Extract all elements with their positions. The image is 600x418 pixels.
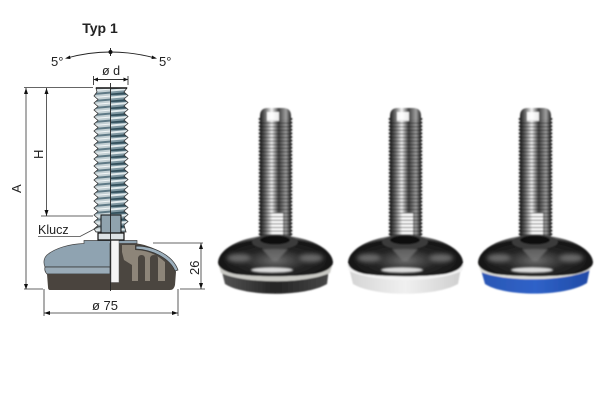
base: grey dome half [44, 240, 137, 267]
title: Typ 1 [82, 20, 118, 36]
tilt angle indicator: 5° [159, 54, 171, 69]
wrench flat [101, 215, 121, 233]
dimension diameter 75: ø 75 [92, 298, 118, 313]
dimension 26 [153, 243, 205, 289]
threaded rod [94, 88, 128, 232]
nut [98, 233, 124, 240]
centre line [110, 83, 112, 291]
dimension diameter 75 [44, 289, 178, 316]
dimension 26: 26 [187, 261, 202, 275]
ball joint slot [111, 240, 119, 282]
diameter d dimension: ø d [102, 64, 120, 78]
dimension H: H [31, 150, 46, 159]
base: section right half [110, 244, 178, 290]
technical drawing: section view [9, 48, 205, 316]
photo: leveling foot with black base [218, 108, 333, 294]
dimension A [9, 88, 93, 290]
base: lower grey band [45, 267, 110, 274]
photo: leveling foot with blue base [478, 108, 593, 294]
dimension A: A [9, 184, 24, 193]
tilt angle indicator [51, 48, 171, 69]
wrench label [38, 223, 100, 237]
diameter d dimension [94, 64, 128, 85]
base: dark pad left [47, 274, 110, 290]
tilt angle indicator: 5° [51, 54, 63, 69]
dimension H [31, 88, 93, 216]
wrench label: Klucz [38, 223, 69, 237]
photo: leveling foot with white base [347, 108, 464, 294]
